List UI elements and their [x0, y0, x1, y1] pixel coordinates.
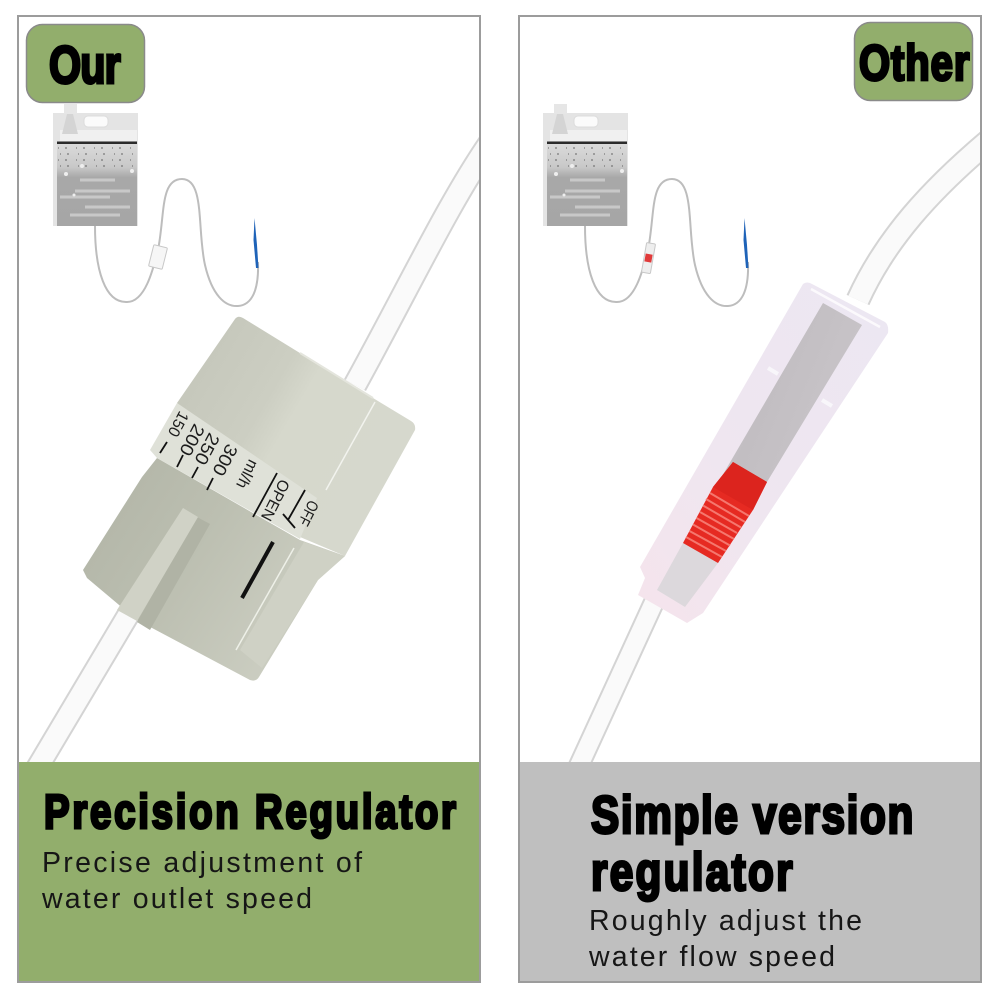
ring labels: ml/h [232, 457, 261, 491]
caption: simple version regulator: Simple version [591, 787, 913, 845]
regulator upper nut [177, 317, 415, 556]
icon: infusion bag with tube [543, 104, 748, 306]
caption: precision regulator: Precision Regulator [44, 786, 456, 839]
caption: precision regulator [19, 762, 479, 981]
regulator lower nut [83, 458, 345, 681]
ring labels [160, 408, 321, 528]
caption: simple version regulator: Roughly adjust the [589, 905, 862, 937]
panel: our precision regulator [18, 16, 492, 982]
ring labels: 150 [164, 408, 191, 439]
regulator marker line [242, 542, 273, 598]
caption: precision regulator: water outlet speed [41, 883, 312, 915]
caption: simple version regulator: regulator [591, 844, 793, 902]
ring labels: OPEN [257, 476, 292, 523]
regulator clear body [638, 282, 888, 623]
caption: precision regulator: Precise adjustment of [42, 847, 362, 879]
badge: other: Other [859, 35, 969, 91]
white tube behind regulator [36, 140, 492, 770]
regulator scale ring [150, 403, 321, 539]
badge: other [854, 22, 972, 100]
badge: our: Our [49, 36, 121, 95]
panel: other simple regulator [519, 16, 992, 982]
badge: our [26, 24, 144, 102]
ring labels: 250 [190, 430, 224, 468]
regulator red wheel [683, 462, 767, 563]
ring labels: OFF [294, 497, 321, 528]
ring labels: 300 [208, 441, 242, 479]
ring labels: 200 [175, 421, 209, 459]
white tube behind regulator [577, 138, 992, 770]
caption: simple version regulator [520, 762, 980, 981]
icon: infusion bag with tube [53, 104, 258, 306]
caption: simple version regulator: water flow speed [588, 941, 835, 973]
